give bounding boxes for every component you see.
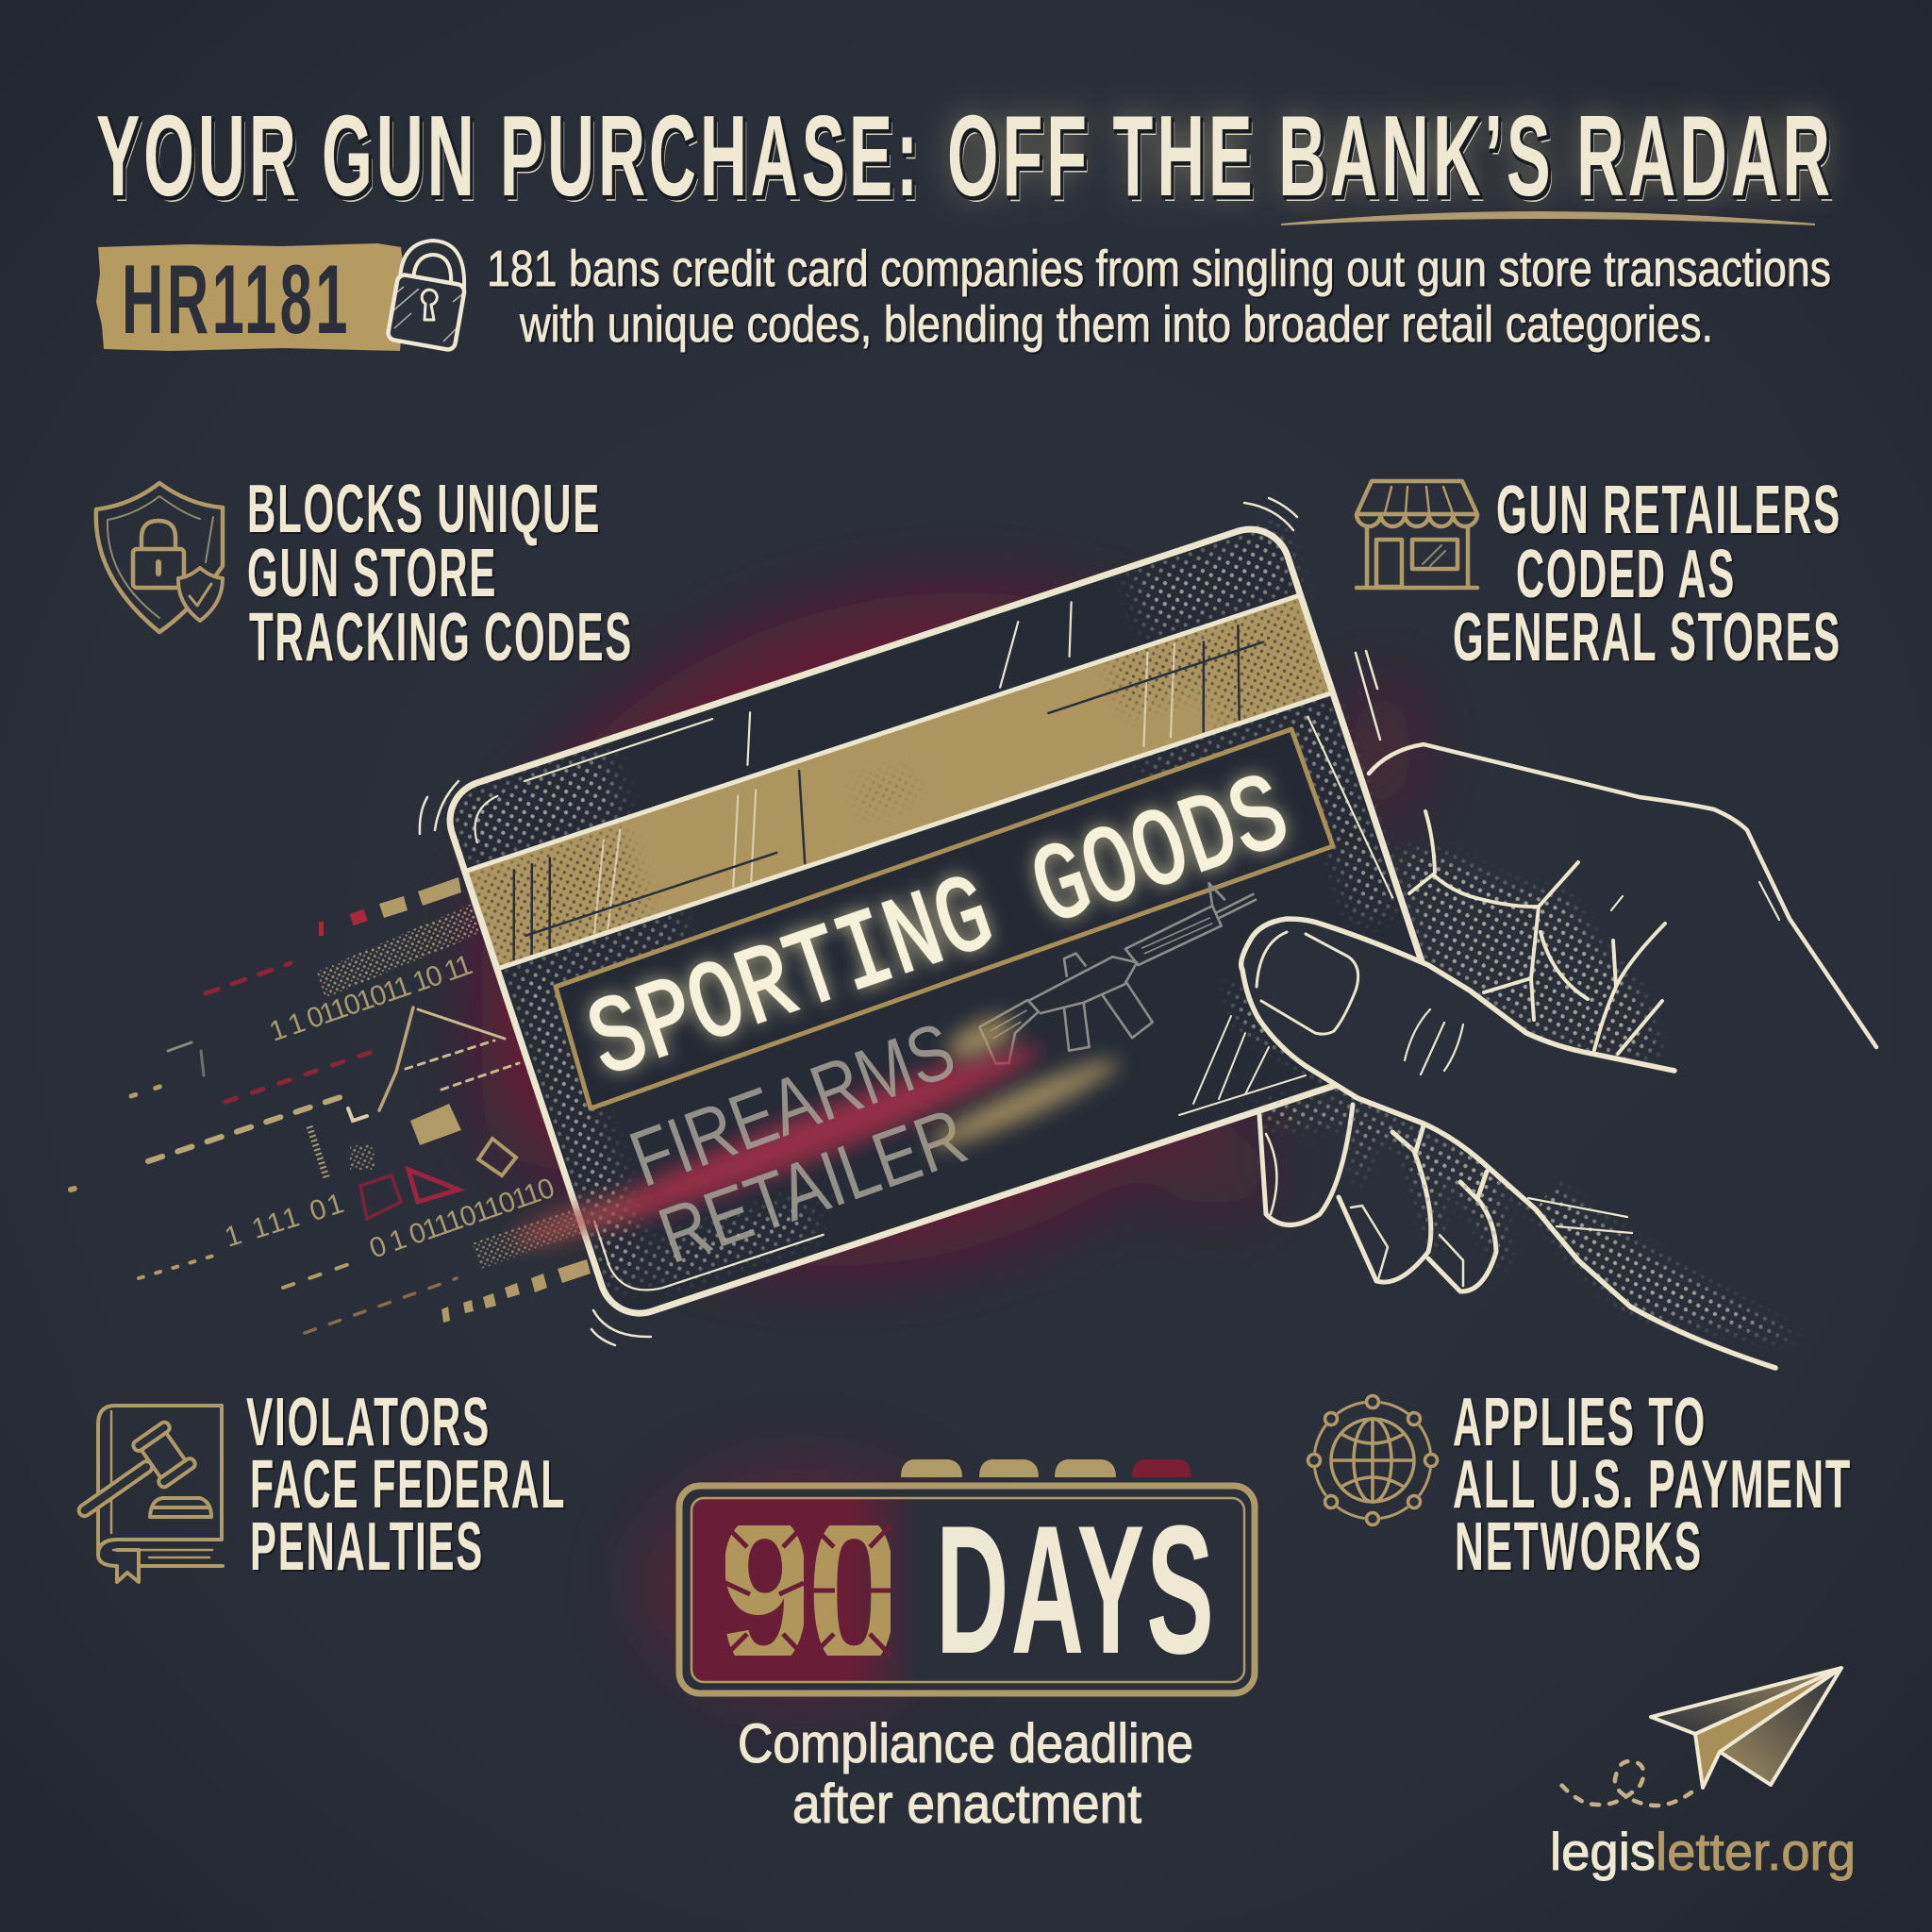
word DAYS: DAYS: [936, 1488, 1216, 1692]
fingers behind the card: [1259, 1105, 1496, 1291]
data trail streaming from card: [71, 877, 591, 1333]
red data blocks: [319, 909, 368, 936]
timer tabs: [901, 1459, 1191, 1477]
hand holding card: [1241, 744, 1876, 1368]
card outline and scratches: [440, 519, 1450, 1324]
website logo: legisletter.org: [1550, 1822, 1856, 1881]
inner frame line: [691, 1498, 1244, 1682]
gold data blocks: [379, 877, 591, 1323]
text: VIOLATORS: [246, 1385, 491, 1460]
text: [246, 1385, 566, 1585]
text: GUN STORE: [247, 536, 497, 611]
red glow: [641, 1467, 962, 1703]
summary text: with unique codes, blending them into broader retail categories.: [519, 296, 1713, 353]
red panel: [691, 1498, 918, 1682]
smear: red streak: [508, 1027, 1048, 1255]
back of hand outline: [1369, 744, 1876, 1047]
text: FACE FEDERAL: [250, 1447, 566, 1523]
binary rows: [221, 949, 558, 1265]
label: sporting goods: SPORTING GOODS: [575, 753, 1305, 1107]
icon: padlock: [387, 241, 465, 351]
card hatch lines near thumb: [1179, 1016, 1306, 1115]
stripe halftone: [471, 598, 1327, 965]
text: TRACKING CODES: [249, 600, 633, 675]
text: BLOCKS UNIQUE: [247, 472, 601, 547]
number 90: 90: [719, 1470, 901, 1713]
text: [1453, 473, 1841, 675]
thumbnail: [1257, 932, 1358, 1034]
display panel: sporting goods: [556, 729, 1333, 1108]
timer frame: [679, 1486, 1255, 1693]
compliance caption: Compliance deadline: [738, 1713, 1193, 1774]
icon: shield with lock: [96, 483, 223, 632]
dashed stream lines: [71, 963, 519, 1333]
text: PENALTIES: [250, 1509, 484, 1585]
icon: rifle: [964, 868, 1288, 1092]
sand bands: [317, 904, 479, 998]
label: firearms retailer (crossed out): [619, 1005, 977, 1280]
thumb fill: [1241, 919, 1674, 1209]
smear: gold streak: [923, 1008, 1124, 1158]
segment cuts: [725, 1525, 891, 1656]
text: [1453, 1385, 1852, 1585]
label: firearms retailer (crossed out): FIREARMS: [619, 1005, 966, 1204]
card halftone: [443, 521, 1405, 1296]
text: NETWORKS: [1455, 1509, 1703, 1585]
bill tag: HR1181: [96, 243, 406, 355]
callout: payment networks: [1307, 1385, 1852, 1585]
callout: federal penalties: [64, 1385, 566, 1585]
summary text: [487, 241, 1831, 353]
glitch shapes: [478, 1139, 516, 1175]
countdown timer: 90 days: [641, 1459, 1255, 1713]
credit card: [443, 521, 1424, 1317]
binary rows: 0 1 01110110110: [366, 1173, 558, 1265]
thumb outline: [1241, 919, 1775, 1368]
bill tag: HR1181: HR1181: [122, 245, 351, 355]
text: CODED AS: [1516, 537, 1736, 612]
icon: globe network: [1307, 1396, 1438, 1524]
callout: blocks tracking codes: [96, 472, 633, 675]
halftone shading on hand: [1224, 842, 1793, 1347]
red glow behind card: [391, 487, 1415, 1372]
callout: retailers coded: [1357, 473, 1841, 675]
compliance caption: after enactment: [792, 1774, 1141, 1835]
text: [247, 472, 633, 675]
card body: [460, 572, 1381, 1294]
icon: paper plane: [1561, 1668, 1841, 1806]
title: YOUR GUN PURCHASE:: [96, 92, 922, 220]
binary rows: 1 1 01101011 10 11: [266, 949, 476, 1048]
icon: law book and gavel: [64, 1406, 223, 1582]
compliance caption: [738, 1713, 1193, 1835]
motion marks around card: [420, 498, 1380, 1345]
knuckle creases: [1409, 811, 1665, 1054]
title underline: [1281, 212, 1815, 225]
icon: storefront: [1357, 481, 1477, 588]
label: firearms retailer (crossed out): RETAILER: [648, 1091, 977, 1280]
magnetic stripe: [467, 595, 1331, 969]
text: APPLIES TO: [1453, 1385, 1707, 1460]
binary rows: 1 111 01: [221, 1188, 347, 1254]
